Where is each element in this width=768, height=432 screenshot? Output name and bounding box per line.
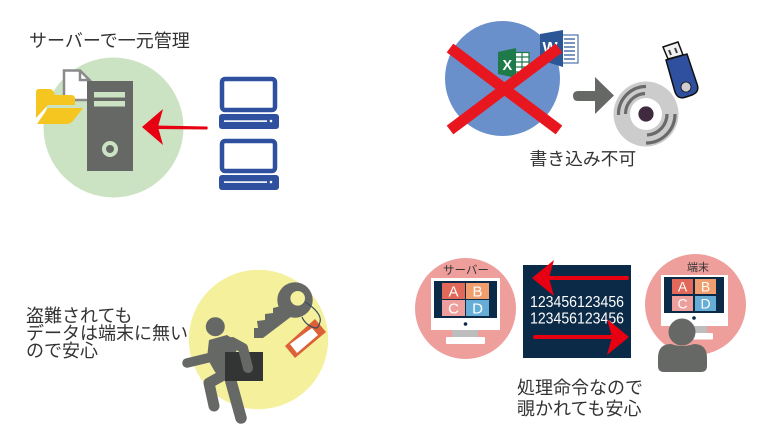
icon: excel file [498, 48, 529, 78]
caption: safe if stolen: データは端末に無い [26, 324, 188, 344]
tiles ABCD: C [677, 296, 688, 312]
tiles ABCD: D [472, 300, 483, 318]
panel: theft safety [26, 270, 328, 418]
arrow: gray [573, 77, 614, 114]
numbers: 123456123456 [530, 294, 624, 311]
tiles ABCD: A [448, 284, 459, 300]
arrow: terminals to server [142, 109, 208, 145]
icon: word file: W [542, 40, 558, 57]
tiles ABCD: D [700, 296, 711, 312]
terminal monitor group [645, 254, 746, 372]
tiles ABCD: A [678, 278, 688, 294]
navy data panel [523, 260, 631, 358]
caption: commands safe even if seen: 処理命令なので [517, 378, 643, 398]
panel: server central management [29, 31, 279, 198]
icon: word file [540, 30, 578, 67]
yellow background circle [189, 270, 328, 409]
icon: terminal top [219, 79, 279, 129]
icon: terminal bottom [219, 141, 279, 190]
icon: excel file: X [502, 58, 512, 74]
panel: processing commands safe [415, 254, 746, 419]
blue background circle [445, 21, 560, 136]
icon: running thief [187, 317, 263, 418]
tiles ABCD [672, 278, 716, 312]
panel: no writing to media [445, 21, 698, 169]
icon: key [254, 282, 313, 338]
green background circle [44, 58, 184, 198]
caption: safe if stolen: 盗難されても [26, 306, 133, 326]
monitor [661, 275, 728, 326]
icon: document [64, 70, 90, 100]
red cross [450, 48, 559, 130]
numbers [530, 294, 624, 328]
caption: write not allowed: 書き込み不可 [530, 149, 636, 169]
arrow: right [533, 319, 629, 355]
caption: safe if stolen: ので安心 [26, 341, 98, 361]
tiles ABCD [442, 283, 489, 318]
arrow: left [532, 260, 629, 296]
icon: folder [36, 89, 83, 124]
thief arm [232, 342, 248, 368]
monitor [431, 278, 500, 330]
server monitor group [415, 258, 516, 359]
heading: central management: サーバーで一元管理 [29, 31, 190, 51]
caption: commands safe even if seen [517, 378, 643, 419]
numbers: 123456123456 [530, 310, 624, 328]
icon: key tag [285, 302, 326, 358]
tiles ABCD: B [701, 278, 710, 294]
label: terminal: 端末 [687, 260, 709, 274]
tiles ABCD: C [448, 300, 459, 318]
caption: safe if stolen [26, 306, 188, 361]
icon: viewer person [658, 318, 707, 372]
icon: USB memory [663, 42, 698, 98]
icon: server tower [87, 81, 133, 171]
tiles ABCD: B [472, 284, 483, 300]
label: server: サーバー [443, 264, 489, 277]
icon: optical disc [614, 82, 678, 146]
briefcase [225, 352, 263, 381]
caption: commands safe even if seen: 覗かれても安心 [517, 399, 642, 419]
